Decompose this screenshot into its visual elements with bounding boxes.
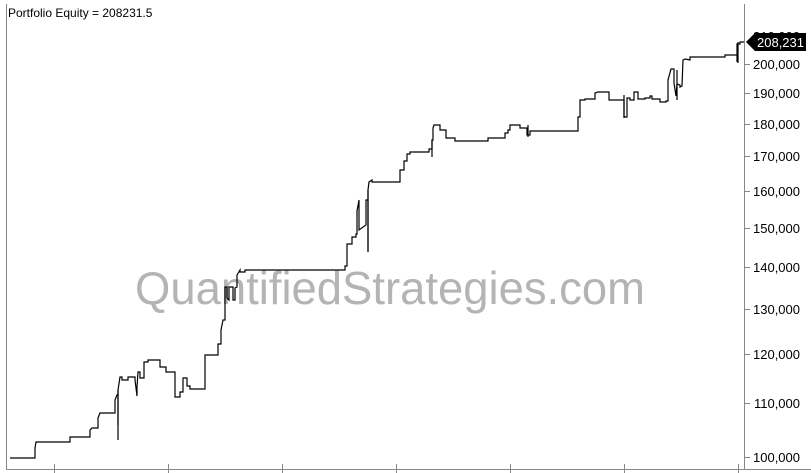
- y axis labels: [753, 29, 800, 465]
- y axis labels: 180,000: [753, 117, 800, 132]
- y axis labels: 190,000: [753, 86, 800, 101]
- y axis labels: 210,000: [753, 29, 800, 44]
- y axis labels: 100,000: [753, 450, 800, 465]
- last value marker: 208,231: [757, 35, 804, 50]
- y axis labels: 120,000: [753, 347, 800, 362]
- y axis labels: 170,000: [753, 149, 800, 164]
- spikes: [118, 42, 738, 440]
- y axis labels: 140,000: [753, 260, 800, 275]
- watermark: QuantifiedStrategies.com: [135, 262, 645, 314]
- y axis labels: 150,000: [753, 221, 800, 236]
- y axis labels: 160,000: [753, 184, 800, 199]
- equity line: [10, 42, 744, 458]
- last value marker: [746, 33, 806, 51]
- title: Portfolio Equity = 208231.5: [8, 6, 153, 20]
- y ticks: [744, 64, 750, 458]
- y axis labels: 130,000: [753, 302, 800, 317]
- y axis labels: 200,000: [753, 57, 800, 72]
- y axis labels: 110,000: [754, 396, 800, 411]
